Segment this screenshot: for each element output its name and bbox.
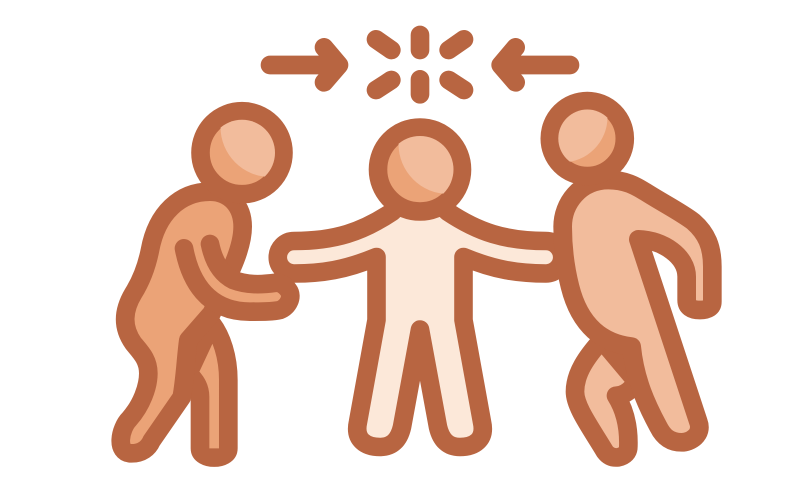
arrow: pointing right [270, 47, 339, 82]
center figure head [368, 118, 472, 221]
right figure torso, arm and front leg [563, 180, 712, 442]
icon: three people in a conflict with a mediator [111, 26, 722, 467]
left figure torso and front leg [121, 192, 243, 453]
arrow: pointing left [501, 47, 570, 82]
clash symbol with arrows [270, 35, 570, 94]
right figure back leg [575, 340, 637, 457]
center figure body [278, 185, 562, 447]
left figure arm [184, 244, 290, 312]
left figure back leg [188, 323, 228, 458]
right figure [516, 72, 712, 457]
right figure head [540, 92, 634, 184]
icon: impact burst [376, 35, 464, 94]
left figure [121, 77, 320, 458]
center figure: mediator [278, 94, 562, 447]
left figure head [191, 102, 293, 204]
